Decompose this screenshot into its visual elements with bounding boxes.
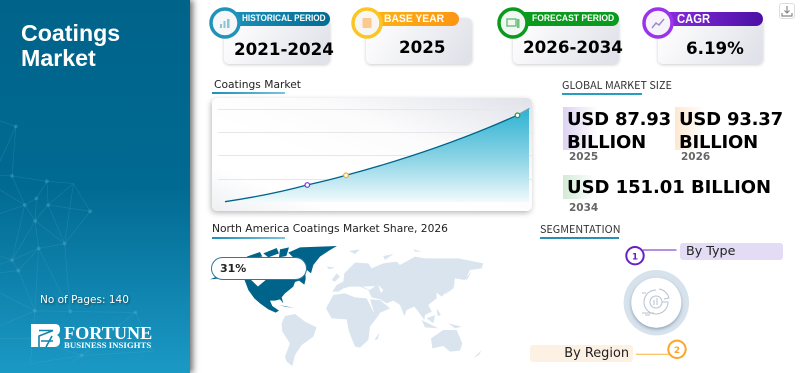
icon: bar chart badge	[209, 7, 240, 39]
badge: 1: 1	[632, 252, 638, 262]
highlight	[563, 175, 595, 199]
card background	[366, 18, 472, 64]
icon: logo mark	[31, 324, 60, 347]
label: By Region: By Region	[564, 346, 629, 361]
header pill: CAGR	[677, 12, 710, 26]
stat: 2034	[563, 175, 771, 214]
label: By Type	[680, 243, 783, 260]
text: number of pages: No of Pages: 140	[40, 294, 129, 306]
text: BUSINESS INSIGHTS: BUSINESS INSIGHTS	[64, 340, 151, 350]
highlight	[675, 107, 705, 150]
center ring	[624, 270, 689, 335]
connector: by region	[636, 353, 669, 355]
title: Coatings	[21, 20, 120, 46]
panel: CAGR	[642, 7, 764, 66]
year: 2025	[569, 151, 598, 163]
callout: 31%	[211, 257, 307, 286]
value: 2025	[399, 37, 445, 57]
header pill	[658, 12, 763, 26]
Eastern hemisphere	[326, 249, 483, 358]
value: BILLION	[567, 132, 646, 152]
header pill	[513, 12, 619, 26]
highlight	[563, 107, 598, 150]
panel: historical period	[209, 7, 334, 66]
value: USD 151.01 BILLION	[567, 177, 771, 198]
connector: by type	[643, 249, 676, 251]
panel: sidebar	[0, 0, 190, 373]
card background	[224, 18, 330, 64]
icon: growth screen badge	[497, 7, 528, 39]
year: 2026	[681, 151, 710, 163]
Americas	[210, 246, 337, 366]
callout pill	[211, 257, 307, 280]
panel: segmentation diagram	[624, 246, 689, 359]
North America highlight	[210, 246, 337, 313]
label: By Type: By Type	[686, 243, 735, 258]
logo: Fortune Business Insights	[31, 323, 152, 350]
heading: Global Market Size: GLOBAL MARKET SIZE	[562, 77, 672, 93]
value	[679, 109, 783, 152]
heading: North America share: North America Coatings Market Share, 2026	[212, 222, 448, 235]
badge: 2: 2	[674, 346, 680, 356]
value: USD 87.93	[567, 109, 671, 130]
panel: line chart	[212, 98, 532, 211]
header pill	[366, 12, 459, 26]
label: By Region	[530, 345, 633, 362]
panel: global market size figures	[563, 107, 783, 214]
panel: forecast period	[497, 7, 623, 66]
heading: Coatings Market: Coatings Market	[214, 78, 301, 91]
value: USD 93.37	[679, 109, 783, 130]
callout pill: 31%	[220, 262, 246, 275]
header pill: BASE YEAR	[384, 13, 444, 25]
value: 6.19%	[686, 38, 744, 58]
callout pointer	[251, 280, 266, 286]
text: FORTUNE: FORTUNE	[64, 323, 152, 343]
year: 2034	[569, 202, 598, 214]
icon: trend badge	[642, 7, 674, 39]
South America	[282, 314, 317, 366]
value: 2026-2034	[523, 37, 623, 57]
value	[567, 109, 671, 152]
icon: segmentation pie	[642, 289, 669, 315]
world map	[210, 246, 484, 366]
stat: 2025	[563, 107, 671, 163]
decorative network pattern	[0, 120, 153, 364]
header pill: HISTORICAL PERIOD	[242, 13, 326, 24]
title: Market	[21, 45, 96, 71]
value: BILLION	[679, 132, 758, 152]
icon: download button	[779, 3, 795, 19]
icon: calendar badge	[351, 7, 383, 39]
header pill: FORECAST PERIOD	[532, 13, 614, 24]
stat: 2026	[675, 107, 783, 163]
heading: Segmentation: SEGMENTATION	[540, 221, 621, 237]
title	[21, 20, 120, 71]
value: 2021-2024	[234, 39, 334, 59]
badge: 1	[626, 247, 644, 264]
card background	[658, 18, 763, 64]
card background	[513, 18, 619, 64]
panel: base year	[351, 7, 474, 66]
badge: 2	[668, 341, 686, 358]
header pill	[224, 12, 330, 26]
